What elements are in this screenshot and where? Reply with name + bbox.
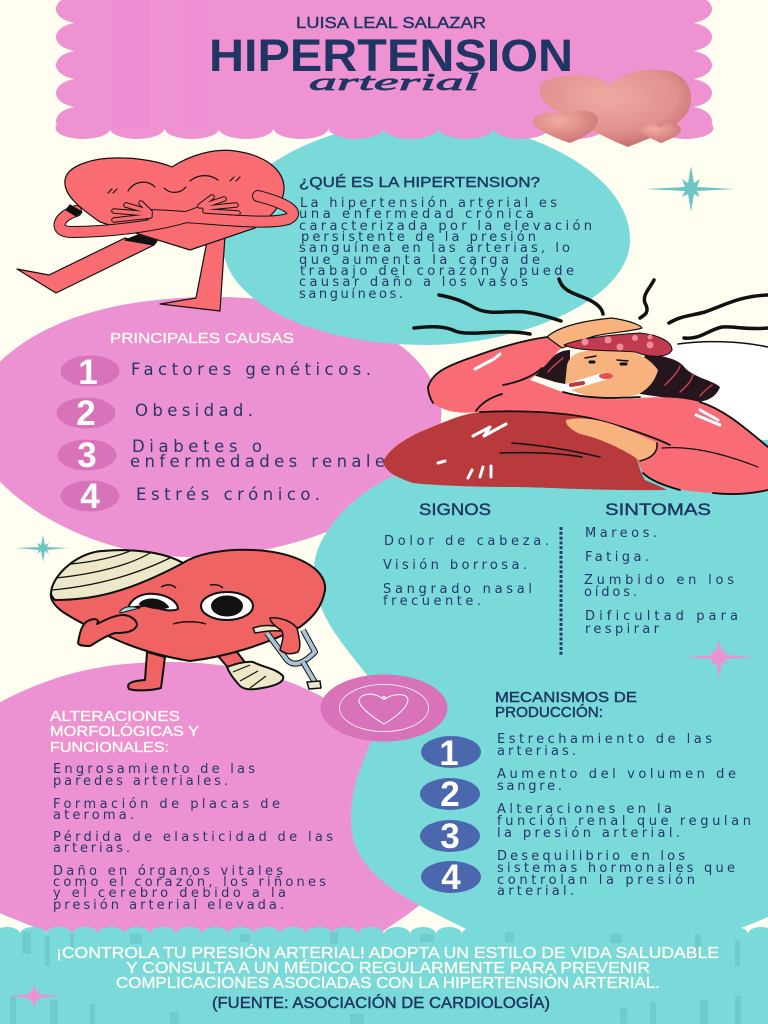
text: signs list: frecuente. bbox=[383, 594, 481, 609]
text: definition: trabajo del corazón y puede bbox=[300, 264, 574, 279]
red compress bbox=[564, 333, 672, 356]
text: mechanisms list: la presión arterial. bbox=[497, 826, 680, 841]
brows and mouth bbox=[161, 585, 223, 624]
panel: what is hypertension blob bbox=[222, 120, 630, 345]
list: causes: Obesidad. bbox=[135, 401, 253, 420]
text: mechanisms list bbox=[497, 732, 751, 899]
text: alterations list: arterias. bbox=[53, 841, 130, 856]
text: symptoms list: Dificultad para bbox=[585, 609, 738, 624]
left arm bbox=[78, 615, 137, 646]
heart body bbox=[51, 550, 325, 661]
list: causes: enfermedades renales bbox=[130, 452, 398, 471]
face bbox=[565, 350, 658, 398]
left eye bbox=[128, 594, 178, 610]
list: causes: Diabetes o bbox=[132, 437, 262, 456]
heading: alterations: MORFOLÓGICAS Y bbox=[50, 723, 199, 740]
text: symptoms list: respirar bbox=[585, 622, 660, 637]
dotted divider bbox=[560, 527, 562, 655]
author name: LUISA LEAL SALAZAR bbox=[296, 15, 486, 32]
decorative heart circle bbox=[320, 674, 448, 742]
text: definition: una enfermedad crónica bbox=[299, 207, 534, 222]
text: symptoms list bbox=[584, 526, 738, 637]
hair bbox=[533, 350, 570, 385]
front leg bbox=[160, 236, 225, 311]
thermometer bbox=[561, 374, 606, 390]
list: mechanisms numbers: 4 bbox=[441, 858, 461, 897]
text: alterations list bbox=[53, 762, 333, 913]
list: mechanisms numbers bbox=[420, 734, 481, 897]
heading: alterations bbox=[50, 709, 199, 756]
text: alterations list: Daño en órganos vitales bbox=[53, 864, 283, 879]
text: signs list bbox=[383, 534, 549, 609]
text: definition: que aumenta la carga de bbox=[299, 253, 540, 268]
text: definition: persistente de la presión bbox=[301, 230, 536, 245]
text: definition bbox=[299, 196, 592, 302]
title: HIPERTENSION bbox=[209, 30, 573, 81]
text: alterations list: como el corazón, los riñones bbox=[53, 875, 326, 890]
text: definition: causar daño a los vasos bbox=[299, 275, 528, 290]
source note: (FUENTE: ASOCIACIÓN DE CARDIOLOGÍA) bbox=[212, 995, 550, 1012]
squiggles bbox=[414, 279, 768, 338]
text: alterations list: Formación de placas de bbox=[53, 797, 280, 812]
icon: teal sparkle top bbox=[645, 166, 735, 212]
fingers outline bbox=[114, 197, 238, 220]
list: causes: 4 bbox=[80, 477, 100, 516]
hand on blanket bbox=[566, 418, 657, 462]
text: signs list: Sangrado nasal bbox=[383, 582, 532, 597]
text: symptoms list: Zumbido en los bbox=[584, 573, 734, 588]
heading: alterations: FUNCIONALES: bbox=[50, 740, 169, 756]
heading: what is hypertension: ¿QUÉ ES LA HIPERTENSION? bbox=[299, 174, 540, 191]
list: causes: 1 bbox=[78, 353, 98, 392]
list: causes: Factores genéticos. bbox=[131, 360, 371, 379]
tear bbox=[120, 607, 140, 613]
facial features bbox=[585, 356, 628, 364]
text: symptoms list: Fatiga. bbox=[585, 550, 649, 565]
text: mechanisms list: Desequilibrio en los bbox=[497, 849, 685, 864]
text: mechanisms list: sangre. bbox=[497, 779, 562, 794]
footer band bbox=[0, 927, 768, 1024]
icon: footer pink sparkle bbox=[8, 983, 60, 1010]
subtitle: arterial bbox=[309, 70, 480, 96]
header banner bbox=[56, 0, 714, 139]
icon: 3D pink hearts bbox=[533, 70, 691, 147]
callout: call to action bbox=[56, 945, 719, 992]
icon: small teal sparkle bbox=[16, 535, 68, 562]
fingers bbox=[114, 197, 238, 220]
callout: call to action: Y CONSULTA A UN MÉDICO REGULARMENTE PARA PREVENIR bbox=[126, 960, 650, 977]
illustration: heart hugging itself bbox=[17, 150, 293, 311]
list: causes: 2 bbox=[76, 394, 96, 433]
text: mechanisms list: Estrechamiento de las bbox=[497, 732, 712, 747]
heart body bbox=[65, 150, 284, 250]
smiling face bbox=[108, 176, 240, 193]
illustration: sick woman in bed bbox=[383, 279, 768, 494]
panel: signs and mechanisms blob bbox=[314, 440, 768, 936]
list: causes: 3 bbox=[77, 436, 97, 475]
text: symptoms list: Mareos. bbox=[585, 526, 657, 541]
text: definition: sanguínea en las arterias, lo bbox=[299, 241, 570, 256]
arms outline bbox=[60, 196, 293, 232]
text: signs list: Dolor de cabeza. bbox=[384, 534, 549, 549]
text: mechanisms list: sistemas hormonales que bbox=[497, 861, 735, 876]
raised hand bbox=[547, 318, 642, 348]
crutch bbox=[267, 630, 316, 684]
text: alterations list: presión arterial elevada. bbox=[53, 898, 284, 913]
callout: call to action: ¡CONTROLA TU PRESIÓN ARTERIAL! ADOPTA UN ESTILO DE VIDA SALUDABLE bbox=[56, 945, 719, 962]
blanket bbox=[383, 411, 667, 490]
bandage bbox=[51, 550, 183, 600]
text: mechanisms list: arterial. bbox=[497, 884, 574, 899]
text: mechanisms list: arterias. bbox=[497, 744, 576, 759]
text: definition: La hipertensión arterial es bbox=[300, 196, 557, 211]
text: mechanisms list: Alteraciones en la bbox=[497, 802, 672, 817]
arms fill bbox=[60, 196, 293, 232]
pillow bbox=[660, 342, 768, 440]
right leg bbox=[217, 652, 247, 672]
heading: signs: SIGNOS bbox=[419, 500, 491, 519]
arm band bbox=[66, 205, 82, 216]
icon: pink sparkle bbox=[685, 640, 755, 678]
heading: main causes: PRINCIPALES CAUSAS bbox=[110, 331, 294, 347]
text: definition: sanguíneos. bbox=[299, 287, 403, 302]
heading: mechanisms: MECANISMOS DE bbox=[495, 690, 637, 706]
sweater highlights bbox=[475, 354, 720, 425]
text: mechanisms list: función renal que regulan bbox=[497, 814, 751, 829]
list: mechanisms numbers: 2 bbox=[440, 775, 460, 814]
list: causes bbox=[56, 353, 398, 516]
text: alterations list: ateroma. bbox=[53, 808, 134, 823]
bandaged foot bbox=[227, 662, 283, 689]
panel: causes blob bbox=[0, 297, 441, 557]
text: mechanisms list: Aumento del volumen de bbox=[497, 767, 736, 782]
heading: mechanisms bbox=[495, 690, 637, 721]
illustration: sad bandaged heart bbox=[51, 550, 325, 690]
text: alterations list: Engrosamiento de las bbox=[53, 762, 255, 777]
right eye bbox=[201, 592, 253, 620]
right arm bbox=[270, 618, 300, 654]
text: symptoms list: oídos. bbox=[584, 585, 637, 600]
heading: symptoms: SINTOMAS bbox=[605, 500, 711, 519]
text: definition: caracterizada por la elevación bbox=[299, 219, 592, 234]
text: alterations list: Pérdida de elasticidad de las bbox=[53, 830, 333, 845]
left leg bbox=[128, 652, 165, 690]
list: mechanisms numbers: 1 bbox=[439, 734, 459, 773]
sweater bbox=[428, 337, 768, 494]
back leg bbox=[17, 238, 154, 293]
list: mechanisms numbers: 3 bbox=[440, 817, 460, 856]
heading: mechanisms: PRODUCCIÓN: bbox=[495, 704, 603, 721]
list: causes: Estrés crónico. bbox=[136, 485, 320, 504]
text: alterations list: y el cerebro debido a la bbox=[53, 886, 286, 901]
text: mechanisms list: controlan la presión bbox=[497, 873, 695, 888]
text: signs list: Visión borrosa. bbox=[383, 558, 527, 573]
heading: alterations: ALTERACIONES bbox=[50, 709, 180, 725]
panel: alterations blob bbox=[0, 662, 425, 935]
callout: call to action: COMPLICACIONES ASOCIADAS CON LA HIPERTENSIÓN ARTERIAL. bbox=[116, 975, 660, 992]
text: alterations list: paredes arteriales. bbox=[53, 774, 228, 789]
